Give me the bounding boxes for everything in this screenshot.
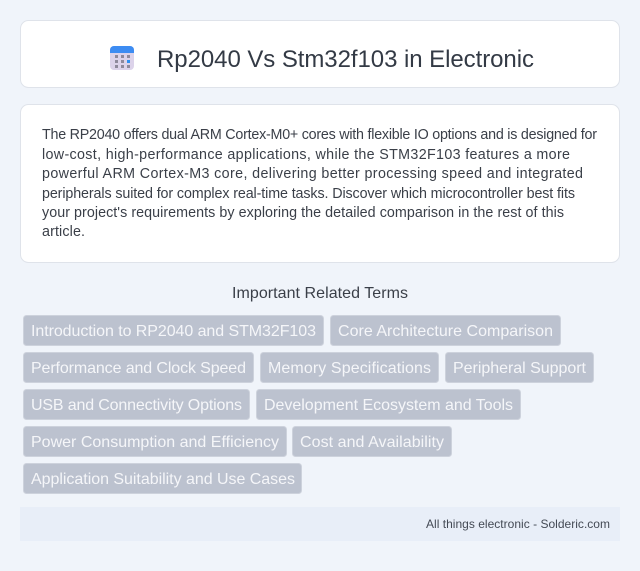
chip: peripheral: Peripheral Support [453, 360, 587, 377]
footer credit: All things electronic - Solderic.com [426, 517, 610, 531]
chip: development [256, 390, 520, 420]
chip: usb [24, 390, 250, 420]
chip: development: Development Ecosystem and Tools [264, 397, 513, 414]
chip: usb: USB and Connectivity Options [31, 397, 242, 414]
description text [42, 127, 597, 240]
chip: performance: Performance and Clock Speed [31, 360, 246, 377]
chip: core architecture: Core Architecture Comparison [338, 323, 553, 340]
chip: performance [24, 352, 254, 382]
chip: application [24, 464, 302, 494]
description text: low-cost, high-performance applications, while the STM32F103 features a more [42, 147, 570, 163]
chip: memory: Memory Specifications [268, 360, 431, 377]
chip: power [24, 426, 286, 456]
description text: powerful ARM Cortex-M3 core, delivering better processing speed and integrated [42, 166, 583, 182]
description text: article. [42, 224, 85, 240]
title: Rp2040 Vs Stm32f103 in Electronic [157, 46, 534, 73]
chip: peripheral [446, 352, 594, 382]
chip: application: Application Suitability and Use Cases [31, 471, 295, 488]
chip: core architecture [330, 316, 560, 346]
chip: cost: Cost and Availability [300, 434, 444, 451]
description text: your project's requirements by exploring the detailed comparison in the rest of this [42, 205, 564, 221]
chip: introduction [24, 316, 324, 346]
chip: power: Power Consumption and Efficiency [31, 434, 279, 451]
description text: The RP2040 offers dual ARM Cortex-M0+ cores with flexible IO options and is designed for [42, 127, 597, 143]
footer [20, 507, 620, 541]
title panel [20, 20, 620, 88]
chip: cost [292, 426, 452, 456]
related term chips [24, 316, 594, 494]
chip: memory [260, 352, 438, 382]
description text: peripherals suited for complex real-time tasks. Discover which microcontroller best fits [42, 186, 575, 202]
heading: related terms: Important Related Terms [232, 285, 408, 302]
chip: introduction: Introduction to RP2040 and STM32F103 [31, 323, 316, 340]
panel: description [20, 104, 620, 262]
icon: calendar [110, 46, 134, 70]
